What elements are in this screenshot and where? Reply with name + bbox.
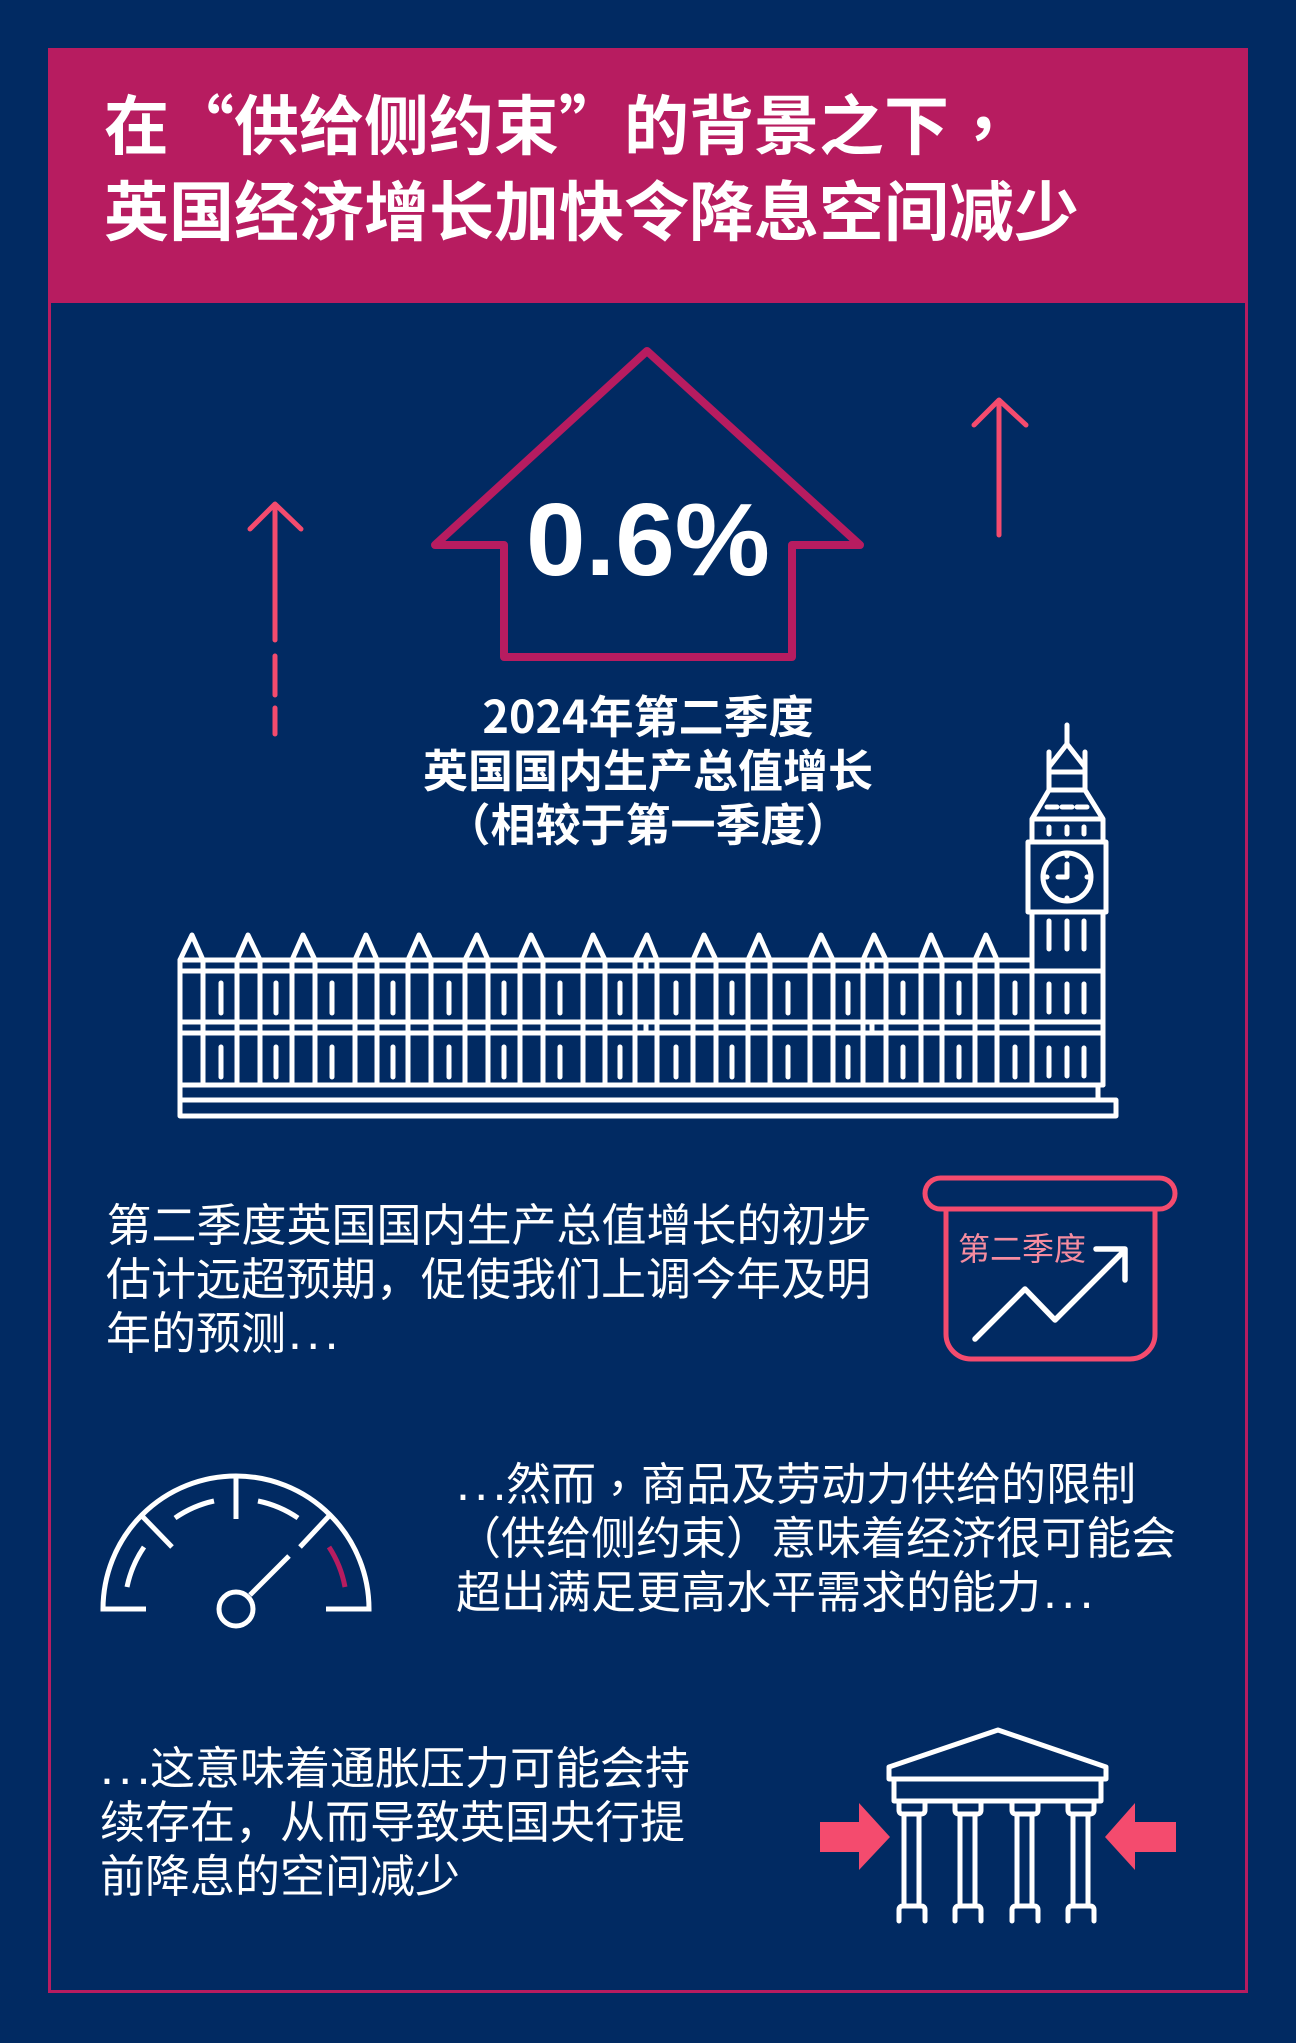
text block: upward revision: 第二季度英国国内生产总值增长的初步 [106,1189,872,1254]
text block: supply constraints: ... [456,1455,511,1511]
value: 0.6%: 0.6% [526,482,770,597]
heading: GDP growth: 2024年第二季度 [482,681,814,746]
text block: upward revision: 估计远超预期，促使我们上调今年及明 [106,1243,871,1308]
clock [1028,842,1106,912]
title [104,57,1079,254]
text block: rate cut implications: 续存在，从而导致英国央行提 [100,1786,685,1851]
tower [1032,725,1103,1085]
panel: title banner [48,48,1248,303]
title: ， [965,57,1030,151]
text block: supply constraints: （供给侧约束）意味着经济很可能会 [456,1502,1176,1567]
icon: Q2 chart board [925,1178,1175,1359]
text block: supply constraints [456,1439,1176,1621]
icon: central bank with squeeze arrows [820,1730,1176,1921]
icon: speedometer gauge [103,1476,369,1626]
building verticals [203,960,997,1085]
label: Q2: 第二季度 [958,1224,1086,1270]
spires [180,935,997,960]
building horizontals [180,960,1116,1116]
arrow: right squeeze [1105,1803,1176,1870]
windows [221,983,1015,1077]
icon: parliament and Big Ben [180,725,1116,1116]
text block: upward revision [106,1189,872,1362]
heading: GDP growth: 英国国内生产总值增长 [423,735,873,800]
arrow: small right up arrow [974,400,1026,535]
heading: GDP growth [423,681,873,854]
arrow: left squeeze [820,1803,890,1870]
text block: rate cut implications: 前降息的空间减少 [100,1840,460,1905]
text block: supply constraints: 超出满足更高水平需求的能力... [456,1556,1098,1621]
text block: rate cut implications: ... [100,1739,155,1795]
text block: supply constraints: ， [607,1439,652,1504]
bank building [889,1730,1106,1921]
chart arrow [975,1249,1125,1339]
title: 英国经济增长加快令降息空间减少 [104,160,1079,254]
text block: supply constraints: 然而 [506,1448,596,1513]
text block: rate cut implications [100,1732,690,1905]
heading: GDP growth: （相较于第一季度） [445,789,851,854]
text block: upward revision: 年的预测... [106,1297,343,1362]
big up arrow with value [435,351,860,657]
text block: rate cut implications: 这意味着通胀压力可能会持 [150,1732,690,1797]
arrow: small left dashed up arrow [250,504,301,734]
text block: supply constraints: 商品及劳动力供给的限制 [641,1448,1136,1513]
title: 在“供给侧约束”的背景之下 [104,74,949,168]
